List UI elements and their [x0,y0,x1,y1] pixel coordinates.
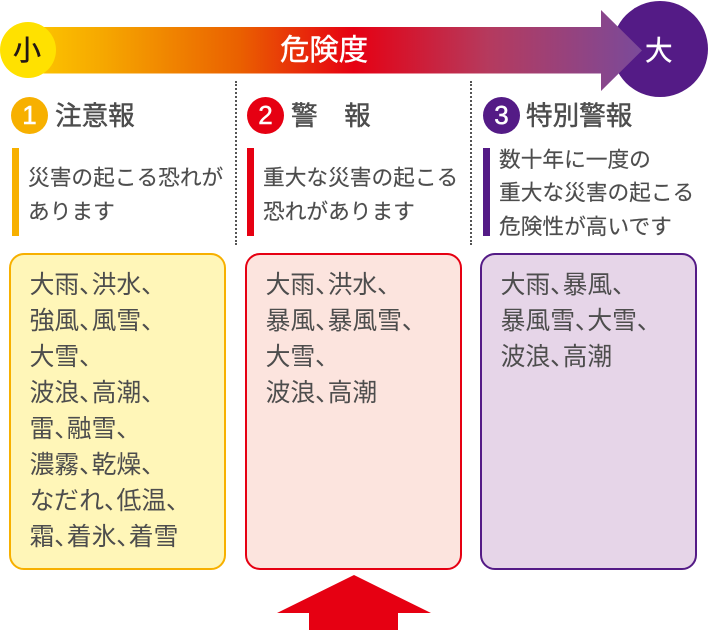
scale title: 危険度 [280,34,368,66]
badge 1: 1 [22,100,37,130]
circle: small end [0,22,56,78]
description 2: 重大な災害の起こる [263,165,458,190]
badge 3 [483,97,520,134]
panel: advisory list: なだれ、低温、 [30,488,179,515]
arrow: up [277,575,431,630]
panel: advisory list: 雷、融雪、 [30,416,129,443]
badge 3: 3 [494,100,509,130]
badge 1 [11,97,48,134]
panel: advisory list: 霜、着氷、着雪 [30,524,178,551]
badge 2 [247,97,284,134]
panel: advisory list: 大雨、洪水、 [30,272,154,299]
badge 2: 2 [258,100,273,130]
accent bar 2 [247,148,254,236]
panel: warning list: 波浪、高潮 [266,380,377,407]
description 3: 数十年に一度の [499,146,651,172]
description 3 [499,146,694,238]
danger scale arrow [0,1,708,97]
panel: advisory list [9,253,226,570]
description 1 [28,165,223,224]
gradient arrow [28,10,642,91]
panel: warning list: 大雪、 [266,344,328,371]
panel: emergency list [480,253,697,570]
circle: large end [612,1,708,97]
description 2: 恐れがあります [263,198,415,224]
description 3: 危険性が高いです [499,214,672,238]
panel: warning list [245,253,462,570]
accent bar 3 [483,148,490,236]
panel: warning list: 大雨、洪水、 [266,272,390,299]
large label: 大 [645,35,672,66]
panel: advisory list: 波浪、高潮、 [30,380,154,407]
panel: advisory list: 強風、風雪、 [30,308,154,335]
heading: warning: 警 報 [291,100,371,130]
panel: warning list: 暴風、暴風雪、 [266,308,414,335]
description 2 [263,165,458,224]
panel: advisory list: 大雪、 [30,344,92,371]
panel: emergency list: 暴風雪、大雪、 [501,308,649,335]
accent bar 1 [12,148,19,236]
description 1: あります [28,198,115,224]
heading: emergency warning: 特別警報 [526,100,632,130]
description 1: 災害の起こる恐れが [28,165,223,190]
divider 1 [235,81,237,245]
panel: advisory list: 濃霧、乾燥、 [30,452,154,479]
description 3: 重大な災害の起こる [499,180,694,205]
heading: advisory: 注意報 [55,100,135,130]
divider 2 [470,81,472,245]
panel: emergency list: 大雨、暴風、 [501,272,625,299]
small label: 小 [13,35,41,66]
panel: emergency list: 波浪、高潮 [501,344,612,371]
